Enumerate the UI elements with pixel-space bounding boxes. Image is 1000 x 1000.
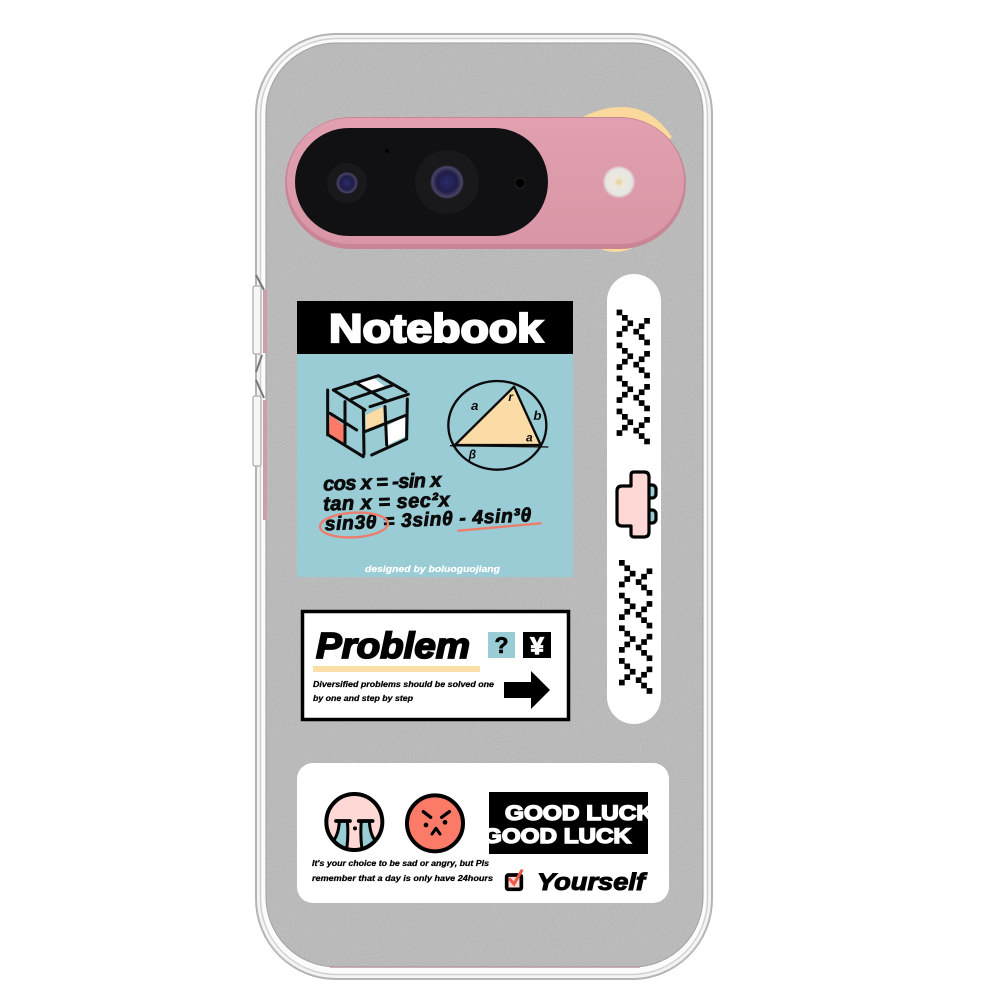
icon: question mark: ? (494, 632, 509, 658)
sensor (515, 178, 525, 188)
panel: notebook sticker (297, 301, 573, 577)
icon: circle with triangle: a (471, 398, 479, 413)
icon: angry face (407, 795, 463, 851)
formulas: sin3θ = 3sinθ - 4sin³θ (324, 505, 532, 535)
icon: circle with triangle: r (508, 390, 514, 404)
case inner rim (260, 38, 708, 974)
heading: Notebook: Notebook (329, 307, 544, 351)
formulas: tan x = sec²x (323, 489, 451, 516)
caption text: It's your choice to be sad or angry, but Pls (312, 859, 490, 868)
camera module (285, 107, 686, 252)
pink bottom edge (330, 966, 640, 968)
left side buttons (253, 286, 261, 466)
description text (313, 680, 495, 703)
pink side rail (263, 290, 267, 520)
yellow sticker behind camera (570, 107, 672, 252)
microphone dot (385, 149, 389, 153)
icon: crying face (326, 794, 382, 850)
good luck banner: GOOD LUCK (483, 825, 631, 848)
icon: rubik cube (328, 376, 408, 457)
description text: Diversified problems should be solved one (313, 680, 495, 689)
credit text: designed by boluoguojiang (365, 564, 501, 574)
label: Yourself: Yourself (537, 869, 647, 896)
notebook body (297, 301, 573, 577)
grey textured back panel (266, 43, 703, 967)
good luck banner (483, 792, 654, 854)
red circle highlight (319, 511, 389, 539)
strip background (607, 274, 661, 724)
icon: circle with triangle: b (533, 408, 541, 423)
clear case outer shell (256, 34, 712, 979)
icon: circle with triangle: a (526, 431, 533, 445)
flash (603, 166, 635, 198)
pixel pattern bottom (619, 560, 652, 694)
heading: Problem: Problem (316, 625, 470, 666)
problem box (302, 612, 568, 720)
panel: good luck sticker (297, 763, 669, 903)
icon: checkbox (507, 871, 522, 889)
notebook header bar (297, 301, 573, 354)
red underline (458, 523, 541, 531)
icon: circle with triangle: β (468, 447, 477, 461)
arrow (504, 671, 550, 709)
panel: problem sticker (302, 612, 568, 720)
panel: vertical strip sticker (607, 274, 661, 724)
good luck banner: GOOD LUCK (505, 802, 654, 825)
formulas (323, 470, 532, 535)
icon: yen: ¥ (530, 633, 544, 660)
black lens window (295, 128, 548, 236)
card background (297, 763, 669, 903)
side button joints (256, 275, 264, 398)
caption text: remember that a day is only have 24hours (312, 874, 494, 883)
description text: by one and step by step (313, 694, 413, 703)
icon: question mark (488, 632, 515, 658)
drawings (319, 376, 548, 539)
icon: pink car (617, 472, 656, 537)
small lens (327, 163, 367, 203)
phone case (253, 34, 712, 979)
icon: circle with triangle (448, 381, 548, 470)
caption text (312, 859, 494, 883)
pixel pattern top (617, 310, 650, 444)
icon: yen (523, 632, 551, 660)
formulas: cos x = -sin x (323, 470, 443, 496)
main lens (415, 150, 479, 214)
pink camera bar (285, 117, 686, 249)
yellow underline (313, 666, 480, 672)
